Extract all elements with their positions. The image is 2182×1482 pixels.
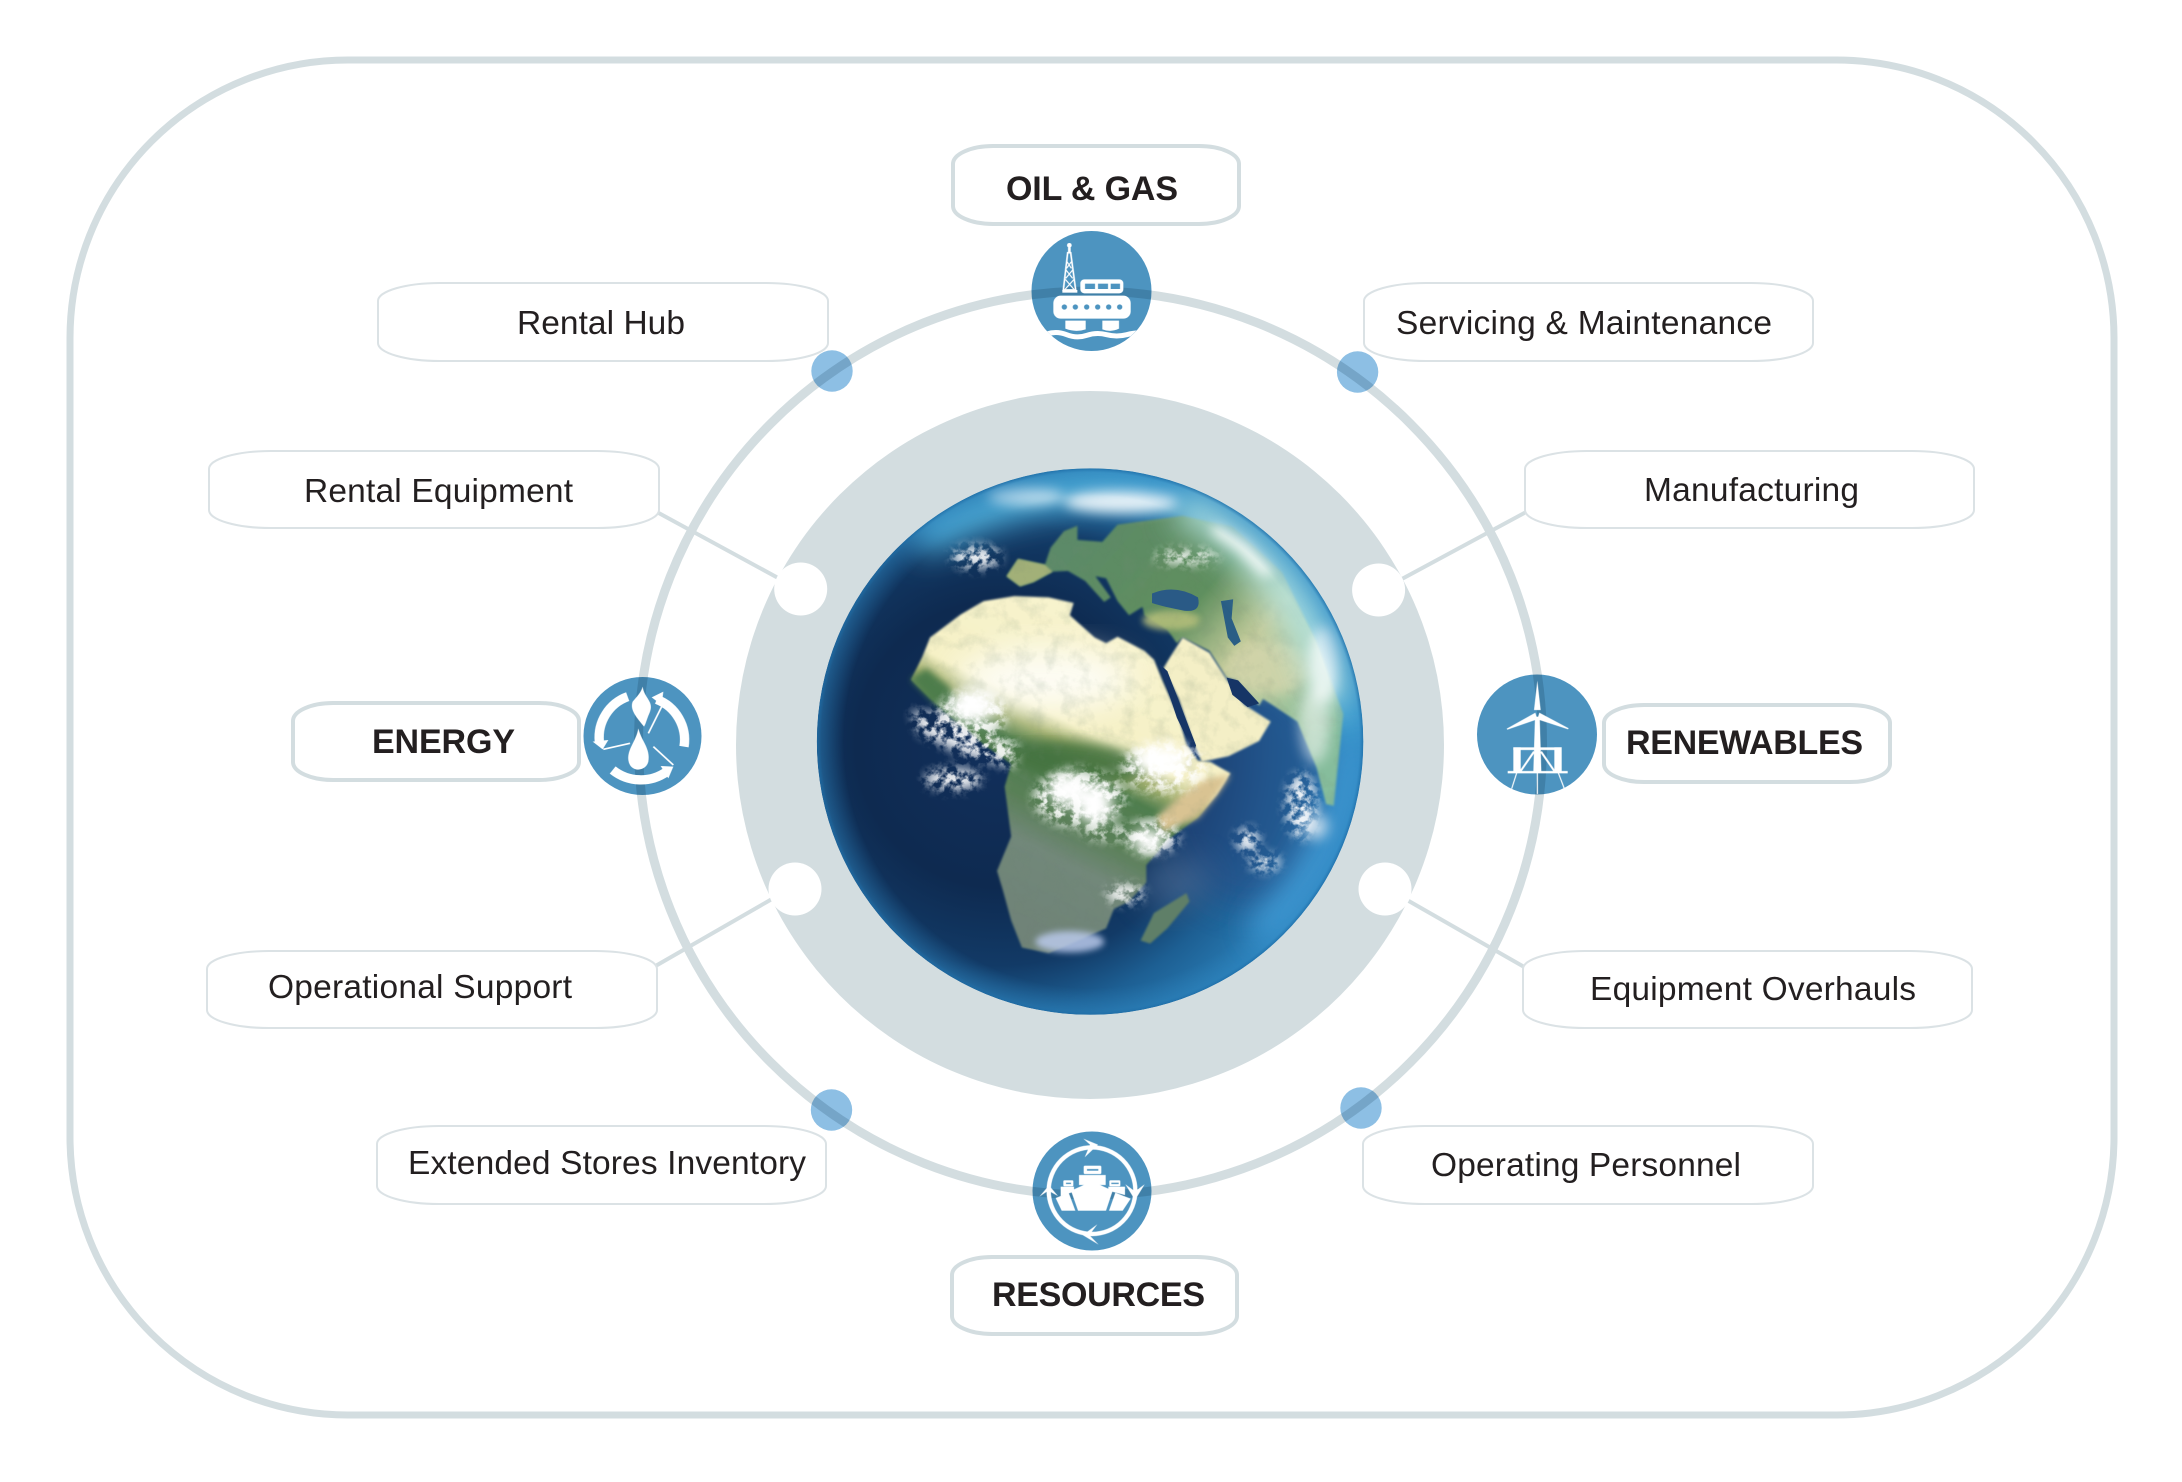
icon: energy cycle with flame and drop (584, 677, 702, 795)
label: Extended Stores Inventory: Extended Stores Inventory (408, 1145, 806, 1182)
label: Rental Equipment: Rental Equipment (304, 473, 574, 510)
label: Operating Personnel (1363, 1126, 1813, 1204)
lower right atmosphere (1259, 741, 1359, 940)
heading box: RENEWABLES (1604, 705, 1890, 782)
label: Manufacturing: Manufacturing (1644, 472, 1859, 509)
label: Operating Personnel: Operating Personnel (1431, 1147, 1741, 1184)
southern cloud (1035, 931, 1104, 952)
connector: Manufacturing (1400, 511, 1528, 580)
blue dot bottom left (811, 1089, 852, 1131)
persian gulf (1227, 678, 1259, 707)
madagascar (1141, 893, 1190, 944)
red sea (1159, 664, 1196, 753)
africa (911, 596, 1230, 953)
label: Manufacturing (1525, 451, 1974, 528)
label: Rental Equipment (209, 451, 659, 528)
label: Servicing & Maintenance (1364, 283, 1813, 361)
eurasia land (1007, 516, 1343, 806)
icon: oil platform (1032, 231, 1152, 351)
top atmosphere haze (915, 486, 1362, 741)
upper atmosphere tint (1183, 500, 1340, 703)
heading box: RESOURCES: RESOURCES (992, 1276, 1205, 1314)
horn of africa (1156, 774, 1230, 833)
blue dot top right (1337, 351, 1378, 393)
speckled clouds (911, 546, 1317, 903)
ocean (817, 468, 1363, 1015)
label: Rental Hub (378, 283, 828, 361)
connector: Operational Support (652, 899, 772, 968)
blue dot bottom right (1340, 1087, 1382, 1129)
ocean pale patch off Mozambique (1141, 856, 1209, 909)
iberia (1007, 559, 1053, 586)
black sea (1152, 590, 1199, 611)
congo forest (1009, 735, 1150, 789)
connector: Equipment Overhauls (1407, 900, 1526, 968)
white node: Operational Support (768, 862, 822, 916)
globe (815, 465, 1366, 1016)
orbit ring (638, 291, 1542, 1195)
label: Operational Support (207, 951, 657, 1028)
terrain mottling on land (923, 597, 1278, 818)
icon: offshore wind turbine (1477, 674, 1597, 794)
white node: Rental Equipment (774, 562, 827, 616)
blue dot top left (811, 350, 853, 392)
persian plateau (1229, 641, 1313, 695)
west african forest (911, 668, 968, 727)
white node: Equipment Overhauls (1358, 862, 1412, 916)
label: Operational Support: Operational Support (268, 969, 573, 1006)
sahara highlight (957, 649, 1133, 710)
limb glow (817, 468, 1363, 1015)
icon: ship with circular arrows (1032, 1132, 1152, 1250)
heading box: ENERGY (293, 703, 579, 780)
heading box: ENERGY: ENERGY (372, 723, 515, 761)
heading box: RESOURCES (952, 1257, 1237, 1334)
label: Servicing & Maintenance: Servicing & Maintenance (1396, 305, 1772, 342)
anatolia (1142, 610, 1200, 630)
white node: Manufacturing (1352, 564, 1405, 616)
heading box: OIL & GAS: OIL & GAS (1006, 170, 1178, 208)
caspian sea (1221, 599, 1241, 646)
grey disc behind the globe (736, 391, 1444, 1099)
soft cloud masses (949, 487, 1340, 853)
heading box: OIL & GAS (953, 146, 1239, 224)
arabia (1164, 637, 1271, 762)
label: Equipment Overhauls: Equipment Overhauls (1590, 971, 1916, 1008)
label: Rental Hub: Rental Hub (517, 305, 685, 342)
label: Extended Stores Inventory (377, 1126, 826, 1204)
connector: Rental Equipment (655, 511, 780, 579)
heading box: RENEWABLES: RENEWABLES (1626, 724, 1863, 762)
label: Equipment Overhauls (1523, 951, 1972, 1028)
ocean light right (1172, 703, 1328, 908)
